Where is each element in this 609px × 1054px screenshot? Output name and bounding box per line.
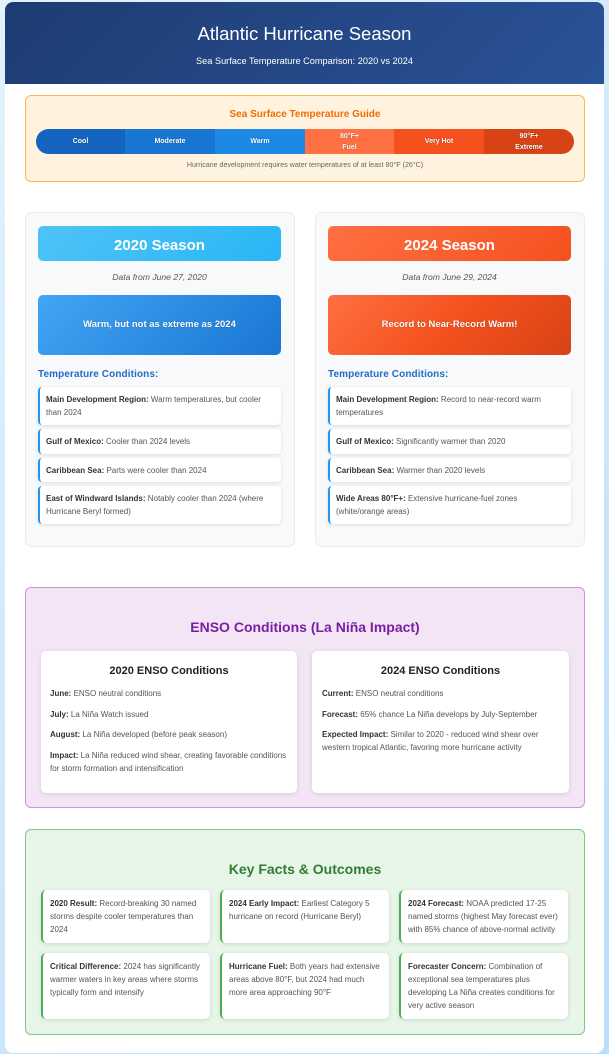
2020 item: east of windward islands: Hurricane Beryl formed) xyxy=(46,507,131,516)
2020 item: caribbean sea: Caribbean Sea: Parts were cooler than 2024 xyxy=(46,466,207,475)
Expected impact: western tropical Atlantic, favoring more hurricane activity xyxy=(322,743,522,752)
Current: Current: ENSO neutral conditions xyxy=(322,689,443,698)
fact: critical difference: Critical Difference: 2024 has significantly xyxy=(50,962,200,971)
2024 item: gulf of mexico: Gulf of Mexico: Significantly warmer than 2020 xyxy=(336,437,505,446)
fact: 2024 forecast: named storms (highest May forecast ever) xyxy=(408,912,558,921)
ENSO 2024 card xyxy=(312,651,569,793)
title: Atlantic Hurricane Season xyxy=(198,23,411,44)
fact: 2024 forecast xyxy=(399,890,568,943)
scale: extreme: Extreme xyxy=(515,144,543,150)
fact: 2024 forecast: with 85% chance of above-normal activity xyxy=(408,925,555,934)
key facts heading: Key Facts & Outcomes xyxy=(229,861,381,877)
fact: forecaster concern: developing La Niña creates conditions for xyxy=(408,988,555,997)
2024 season header: 2024 Season xyxy=(404,237,495,254)
fact: critical difference xyxy=(41,953,210,1019)
2020 conditions heading: Temperature Conditions: xyxy=(38,369,158,380)
panel: 2020 season xyxy=(25,212,295,547)
2024 item: wide areas xyxy=(328,486,571,524)
ENSO 2020 card xyxy=(41,651,297,793)
panel: 2024 season xyxy=(315,212,585,547)
2020 item: main development region: than 2024 xyxy=(46,408,82,417)
Impact: Impact: La Niña reduced wind shear, creating favorable conditions xyxy=(50,751,286,760)
fact: critical difference: typically form and intensify xyxy=(50,988,144,997)
panel: ENSO conditions xyxy=(25,587,585,808)
scale: fuel: Fuel xyxy=(342,144,357,150)
Expected impact xyxy=(322,730,539,752)
scale: extreme xyxy=(484,129,574,154)
fact: critical difference: warmer waters in key areas where storms xyxy=(50,975,198,984)
2024 summary: Record to Near-Record Warm! xyxy=(382,319,517,330)
2020 season header: 2020 Season xyxy=(114,237,205,254)
scale: moderate: Moderate xyxy=(154,138,186,145)
fact: 2020 result: storms despite cooler temperatures than xyxy=(50,912,193,921)
2024 item: main development region: Main Development Region: Record to near-record warm xyxy=(336,395,541,404)
scale: warm xyxy=(215,129,305,154)
fact: forecaster concern xyxy=(399,953,568,1019)
ENSO 2020 card: 2020 ENSO Conditions xyxy=(109,665,229,677)
scale: very hot: Very Hot xyxy=(425,138,453,145)
2020 summary: Warm, but not as extreme as 2024 xyxy=(83,319,236,330)
2020 item: main development region: Main Development Region: Warm temperatures, but cooler xyxy=(46,395,261,404)
fact: hurricane fuel: areas above 80°F, but 2024 had much xyxy=(229,975,364,984)
scale: cool xyxy=(36,129,125,154)
2020 data date: Data from June 27, 2020 xyxy=(112,272,207,282)
fact: 2024 early impact xyxy=(220,890,389,943)
fact: forecaster concern: exceptional sea temperatures plus xyxy=(408,975,530,984)
2024 summary xyxy=(328,295,571,355)
ENSO heading: ENSO Conditions (La Niña Impact) xyxy=(190,619,420,635)
2024 item: caribbean sea: Caribbean Sea: Warmer than 2020 levels xyxy=(336,466,485,475)
fact: hurricane fuel: Hurricane Fuel: Both years had extensive xyxy=(229,962,380,971)
fact: 2024 early impact: hurricane on record (Hurricane Beryl) xyxy=(229,912,361,921)
Impact xyxy=(50,751,286,773)
2020 item: east of windward islands: East of Windward Islands: Notably cooler than 2024 (where xyxy=(46,494,263,503)
2024 item: main development region: temperatures xyxy=(336,408,383,417)
Expected impact: Expected Impact: Similar to 2020 - reduced wind shear over xyxy=(322,730,539,739)
2020 item: gulf of mexico: Gulf of Mexico: Cooler than 2024 levels xyxy=(46,437,190,446)
scale: very hot xyxy=(394,129,484,154)
June: June: ENSO neutral conditions xyxy=(50,689,161,698)
2020 summary xyxy=(38,295,281,355)
scale: warm: Warm xyxy=(250,138,270,145)
ENSO 2024 card: 2024 ENSO Conditions xyxy=(381,665,500,677)
fact: forecaster concern: Forecaster Concern: Combination of xyxy=(408,962,542,971)
2024 item: main development region xyxy=(328,387,571,425)
2020 item: gulf of mexico xyxy=(38,429,281,454)
2020 season header xyxy=(38,226,281,261)
scale: cool: Cool xyxy=(73,138,88,145)
scale: fuel xyxy=(305,129,394,154)
panel: key facts xyxy=(25,829,585,1035)
fact: hurricane fuel: more area approaching 90°F xyxy=(229,988,331,997)
scale: moderate xyxy=(125,129,215,154)
2024 season header xyxy=(328,226,571,261)
subtitle: Sea Surface Temperature Comparison: 2020 vs 2024 xyxy=(196,56,413,66)
2024 item: gulf of mexico xyxy=(328,429,571,454)
August: August: La Niña developed (before peak season) xyxy=(50,730,227,739)
2024 conditions heading: Temperature Conditions: xyxy=(328,369,448,380)
fact: 2020 result: 2024 xyxy=(50,925,68,934)
2024 data date: Data from June 29, 2024 xyxy=(402,272,497,282)
guide heading: Sea Surface Temperature Guide xyxy=(230,109,380,120)
fact: 2020 result: 2020 Result: Record-breaking 30 named xyxy=(50,899,196,908)
2020 item: main development region xyxy=(38,387,281,425)
scale: fuel: 80°F+ xyxy=(340,132,359,140)
2024 item: wide areas: (white/orange areas) xyxy=(336,507,409,516)
fact: hurricane fuel xyxy=(220,953,389,1019)
2024 item: caribbean sea xyxy=(328,458,571,482)
scale: extreme: 90°F+ xyxy=(520,132,538,140)
guide note: Hurricane development requires water temperatures of at least 80°F (26°C) xyxy=(187,161,423,169)
2020 item: east of windward islands xyxy=(38,486,281,524)
Forecast: Forecast: 65% chance La Niña develops by July-September xyxy=(322,710,537,719)
fact: 2024 early impact: 2024 Early Impact: Earliest Category 5 xyxy=(229,899,370,908)
temperature scale bar xyxy=(36,129,574,154)
panel: temperature guide xyxy=(25,95,585,182)
Impact: for storm formation and intensification xyxy=(50,764,183,773)
header banner xyxy=(5,2,604,84)
July: July: La Niña Watch issued xyxy=(50,710,148,719)
2024 item: wide areas: Wide Areas 80°F+: Extensive hurricane-fuel zones xyxy=(336,494,517,503)
fact: 2024 forecast: 2024 Forecast: NOAA predicted 17-25 xyxy=(408,899,546,908)
fact: forecaster concern: very active season xyxy=(408,1001,474,1010)
fact: 2020 result xyxy=(41,890,210,943)
2020 item: caribbean sea xyxy=(38,458,281,482)
